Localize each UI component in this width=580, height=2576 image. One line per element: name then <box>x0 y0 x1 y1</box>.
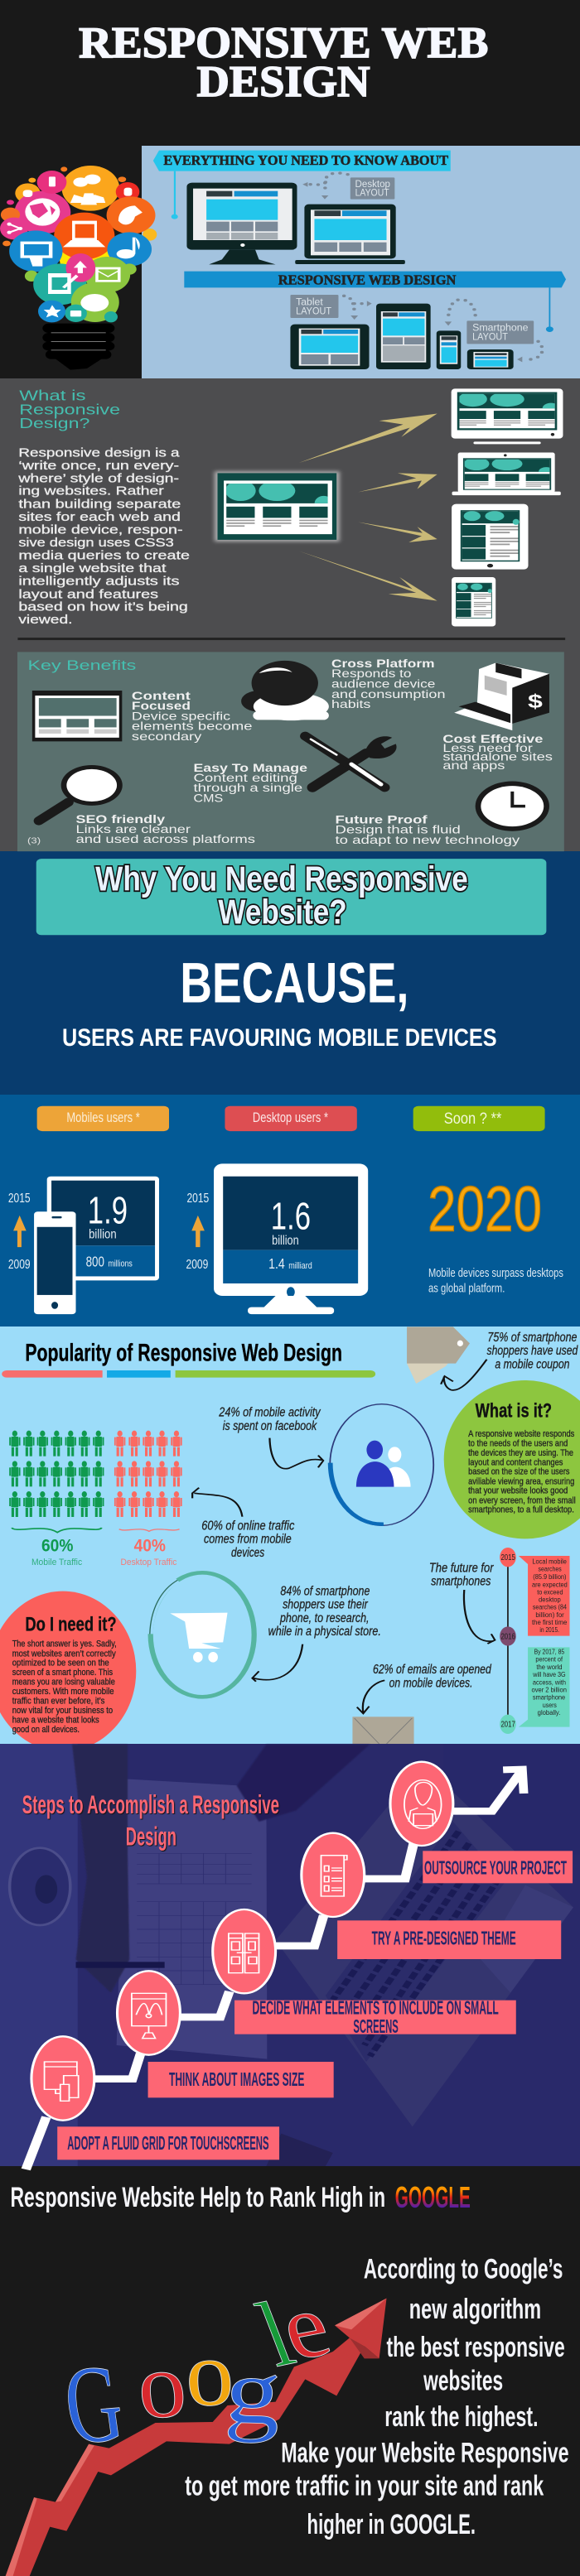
text: easy to manage: Content editing <box>193 773 297 785</box>
icon: tablet <box>452 504 529 570</box>
text: content focused: Device specific <box>132 710 231 723</box>
text block: explanation: mobile device, respon- <box>18 524 183 537</box>
icon: cash register <box>454 663 549 730</box>
page background: users panel <box>0 1095 580 1327</box>
callout: 24 percent: is spent on facebook <box>223 1418 317 1432</box>
icon: colourful light bulb <box>0 166 157 370</box>
text: easy to manage: through a single <box>193 782 302 795</box>
pictogram: mobile traffic people <box>9 1431 104 1517</box>
step 2: images size <box>118 1971 334 2097</box>
banner: responsive web design <box>184 272 566 288</box>
badge: soon <box>413 1106 545 1131</box>
callout: future for smartphones <box>429 1561 494 1588</box>
section: what is responsive design <box>17 388 565 851</box>
label: desktop layout <box>350 177 394 200</box>
text: future proof <box>335 814 520 847</box>
callout: 60 percent traffic <box>201 1519 294 1559</box>
label: tablet layout <box>290 295 338 318</box>
path: rising staircase line <box>26 1774 520 2169</box>
chart: desktop users: 2009 <box>186 1257 208 1271</box>
pictogram: desktop traffic people <box>114 1431 182 1517</box>
page background: what is panel <box>0 378 580 853</box>
text block: explanation: ing websites. Rather <box>18 485 164 498</box>
icon: landscape tablet <box>290 325 370 369</box>
step 4: pre-designed theme <box>302 1833 561 1959</box>
text block: explanation: than building separate <box>18 498 181 511</box>
note: 2017: the world <box>536 1664 563 1672</box>
section: popularity <box>0 1327 580 1758</box>
chart: mobile users: 800 <box>86 1254 104 1270</box>
callout: 84 percent <box>268 1584 381 1638</box>
heading: what is responsive design: Design? <box>19 416 89 432</box>
banner: everything you need to know <box>153 151 451 171</box>
text: future proof: Future Proof <box>335 814 428 826</box>
badge: desktop users: Desktop users * <box>253 1110 328 1125</box>
icon: cloud <box>241 661 329 720</box>
heading: what is responsive design <box>19 388 120 432</box>
note: 2015: billion) for <box>535 1611 564 1620</box>
icon: monitor <box>452 388 563 444</box>
stat: 60 percent: Mobile Traffic <box>31 1557 82 1567</box>
callout: 84 percent: while in a physical store. <box>268 1624 381 1638</box>
arrow: to facebook circle <box>269 1438 323 1469</box>
panel: do I need it: The short answer is yes. Sadly, <box>12 1639 117 1649</box>
text block: explanation: Responsive design is a <box>18 447 180 460</box>
icon: central website <box>215 471 340 542</box>
note: 2017: users <box>543 1702 557 1710</box>
text: seo friendly <box>76 814 255 846</box>
chart: mobile users: billion <box>89 1226 117 1241</box>
text: cross platform: habits <box>331 699 370 711</box>
text: future proof: Design that is fluid <box>335 825 461 836</box>
callout: future for smartphones: The future for <box>429 1561 494 1575</box>
text: source note: (3) <box>27 836 41 845</box>
icon: shopping cart circle <box>150 1572 254 1697</box>
callout: 60 percent traffic: devices <box>231 1545 264 1559</box>
photo background: desk <box>0 1744 580 2166</box>
text: easy to manage <box>193 763 307 805</box>
text: content focused <box>132 691 252 743</box>
note: 2015: desktop <box>539 1596 561 1604</box>
note: 2015 <box>519 1556 570 1636</box>
stat: 60 percent: 60% <box>41 1536 73 1555</box>
text: seo friendly: Links are cleaner <box>76 824 191 836</box>
text: easy to manage: CMS <box>193 792 223 805</box>
arrow: to envelope <box>357 1680 384 1713</box>
logo: Google letters: o <box>133 2333 191 2438</box>
panel: do I need it <box>0 1591 136 1758</box>
logo: Google letters <box>57 2274 342 2468</box>
callout: 60 percent traffic: 60% of online traffic <box>201 1519 294 1533</box>
chart: desktop users: 1.6 <box>271 1195 311 1238</box>
icon: magnifier <box>39 765 123 821</box>
text: content focused: elements become <box>132 720 252 733</box>
heading: what is responsive design: What is <box>19 388 86 404</box>
icon: landscape phone <box>467 349 514 369</box>
text: cross platform: audience device <box>331 679 435 691</box>
text: cross platform: Cross Platform <box>331 658 435 671</box>
text: seo friendly: SEO friendly <box>76 814 166 826</box>
logo: Google letters: e <box>268 2274 342 2380</box>
text: cross platform: and consumption <box>331 689 446 701</box>
badge: mobiles users <box>37 1106 169 1131</box>
badge: soon: Soon ? ** <box>444 1109 502 1128</box>
page background: hero <box>0 0 580 381</box>
callout: 62 percent: 62% of emails are opened <box>373 1662 491 1676</box>
icon: envelope <box>352 1717 414 1744</box>
chart: mobile users: 2015 <box>8 1191 31 1205</box>
arrow: dotted smartphone <box>445 300 543 362</box>
heading box: why you need <box>36 859 546 935</box>
panel: key benefits <box>17 652 564 851</box>
chart: mobile users: 1.9 <box>88 1189 128 1232</box>
arrow: to people <box>192 1488 242 1517</box>
logo: Google letters: l <box>244 2282 307 2386</box>
section: google ranking <box>6 2181 569 2576</box>
arrow: dotted tablet <box>344 296 372 320</box>
heading: steps <box>22 1789 279 1851</box>
text: cost effective: Less need for <box>442 743 533 754</box>
icon: red rising arrow <box>6 2299 387 2576</box>
label: desktop layout: Desktop <box>355 179 390 190</box>
note: 2017 <box>519 1647 570 1727</box>
text block: explanation: layout and features <box>18 588 158 601</box>
text block: explanation: viewed. <box>18 614 73 627</box>
chart: desktop users: 2015 <box>186 1191 209 1205</box>
timeline: smartphones: 2016 <box>500 1631 515 1641</box>
step 5: outsource project <box>390 1762 573 1883</box>
callout: 84 percent: phone, to research, <box>279 1611 370 1625</box>
page background: google panel <box>0 2166 580 2576</box>
panel: do I need it: means you are losing valuable <box>12 1677 115 1687</box>
callout: 62 percent: on mobile devices. <box>389 1676 473 1690</box>
logo: Google letters: o <box>183 2321 236 2426</box>
chart: desktop users <box>186 1163 368 1314</box>
headline: because: BECAUSE, <box>180 952 408 1015</box>
text: content focused: Focused <box>132 701 191 713</box>
panel: do I need it: customers. With more mobile <box>12 1686 114 1697</box>
note: 2017: percent of <box>535 1656 563 1664</box>
paper <box>117 1779 267 2059</box>
text block: explanation: where’ style of design- <box>17 472 179 485</box>
label: smartphone layout: LAYOUT <box>472 332 508 343</box>
logo: Google letters: g <box>223 2338 283 2444</box>
stat: 40 percent: Desktop Traffic <box>121 1557 177 1567</box>
text: content focused: Content <box>132 691 191 703</box>
icon: laptop <box>452 453 561 495</box>
text block: explanation: media queries to create <box>18 550 190 562</box>
note: 2017: globally. <box>538 1709 560 1717</box>
step 3: elements on small screens <box>213 1909 516 2037</box>
text block: explanation: sive design uses CSS3 <box>18 537 174 549</box>
panel: do I need it: have a website that looks <box>12 1714 99 1725</box>
callout: 84 percent: shoppers use their <box>283 1597 368 1611</box>
icon: desktop monitor <box>186 183 297 264</box>
arrow: dotted desktop <box>302 173 348 200</box>
note: 2015: searches <box>539 1566 562 1573</box>
callout: future for smartphones: smartphones <box>431 1574 491 1588</box>
heading: what is responsive design: Responsive <box>19 402 120 418</box>
section: steps: THINK ABOUT IMAGES SIZE <box>169 2069 304 2090</box>
icon: coupon tag <box>407 1327 470 1384</box>
panel: do I need it: optimized to be seen on the <box>12 1658 109 1668</box>
icon: phone <box>437 330 461 369</box>
text: cross platform: Responds to <box>331 668 411 681</box>
text block: explanation: sites for each web and <box>18 511 181 524</box>
chart: desktop users: 1.4 <box>268 1256 285 1273</box>
callout: 24 percent: 24% of mobile activity <box>219 1405 321 1419</box>
logo: Google letters: G <box>57 2342 129 2468</box>
laptop <box>276 1764 573 2126</box>
hand <box>72 1745 129 1993</box>
heading: steps: Design <box>126 1822 176 1851</box>
banner: everything you need to know: EVERYTHING YOU NEED TO KNOW ABOUT <box>163 153 448 168</box>
text: easy to manage: Easy To Manage <box>193 763 307 775</box>
brace: mobile <box>12 1528 102 1533</box>
page background: popularity panel <box>0 1327 580 1744</box>
chart: mobile users: 2009 <box>8 1257 31 1271</box>
icon: portrait tablet <box>376 304 431 369</box>
arrow: to cart <box>252 1644 302 1682</box>
tricolour underline <box>2 1370 375 1378</box>
label: desktop layout: LAYOUT <box>355 188 389 199</box>
text block: explanation: a single website that <box>18 562 167 575</box>
section: hero <box>0 18 580 378</box>
arrowhead <box>503 1769 524 1794</box>
chart: desktop users: billion <box>272 1233 299 1248</box>
brace: desktop <box>119 1529 180 1531</box>
arrow: to timeline <box>464 1590 495 1644</box>
heading: key benefits: Key Benefits <box>27 658 136 673</box>
text: cross platform <box>331 658 446 711</box>
label: smartphone layout <box>466 320 534 344</box>
panel: do I need it: screen of a smart phone. This <box>12 1667 114 1678</box>
icon: tools <box>305 736 397 787</box>
icon: clock <box>476 782 549 831</box>
badge: desktop users <box>225 1106 357 1131</box>
text block: explanation: intelligently adjusts its <box>18 575 180 588</box>
timeline: smartphones <box>500 1548 570 1734</box>
chart: mobile users: millions <box>108 1259 133 1269</box>
icon glyphs on bubbles <box>7 175 143 317</box>
label: smartphone layout: Smartphone <box>472 323 529 334</box>
panel: devices overview <box>142 146 580 378</box>
icon: content focused <box>32 691 122 741</box>
note: 2015: to exceed <box>537 1589 563 1596</box>
text: cost effective: and apps <box>442 760 505 773</box>
panel: do I need it: now vital for your business to <box>12 1705 113 1716</box>
panel: do I need it: most websites aren’t correctly <box>12 1648 116 1659</box>
panel: do I need it: good on all devices. <box>12 1724 80 1735</box>
pen <box>76 1962 165 1968</box>
banner: responsive web design: RESPONSIVE WEB DESIGN <box>278 272 456 288</box>
icon: small tablet <box>452 577 495 627</box>
text: content focused: secondary <box>132 731 202 743</box>
panel: do I need it: traffic than ever before, it’s <box>12 1696 105 1706</box>
label: tablet layout: LAYOUT <box>296 306 331 317</box>
text: cost effective: standalone sites <box>442 752 553 763</box>
heading box: why you need: Website? <box>218 893 347 932</box>
section: steps <box>0 1744 580 2169</box>
callout: 84 percent: 84% of smartphone <box>280 1584 370 1598</box>
panel: what is it <box>444 1380 580 1538</box>
timeline: smartphones: 2017 <box>500 1719 515 1729</box>
text block: explanation: ‘write once, run every- <box>18 460 179 473</box>
badge: mobiles users: Mobiles users * <box>66 1110 140 1125</box>
callout: 60 percent traffic: comes from mobile <box>204 1532 292 1546</box>
lens <box>10 1848 70 1925</box>
timeline: smartphones: 2015 <box>500 1553 515 1562</box>
icon: facebook users circle <box>330 1404 433 1525</box>
text block: according to Google <box>185 2252 569 2540</box>
icon: laptop <box>295 205 405 264</box>
step 3: elements on small screens: SCREENS <box>353 2016 399 2037</box>
text block: explanation <box>17 447 190 627</box>
stat: 60 percent <box>31 1536 82 1567</box>
arrow: to tag <box>441 1360 487 1390</box>
label: tablet layout: Tablet <box>296 296 323 308</box>
page background: why section <box>0 851 580 1095</box>
title: DESIGN <box>197 57 370 106</box>
callout: 24 percent <box>219 1405 321 1432</box>
panel: do I need it: Do I need it? <box>25 1613 117 1635</box>
text: future proof: to adapt to new technology <box>335 835 520 847</box>
icon: cash register: $ <box>528 691 543 713</box>
callout: 75 percent <box>487 1330 578 1371</box>
stat: 40 percent: 40% <box>134 1536 166 1555</box>
title <box>79 18 488 106</box>
text: mobile devices surpass <box>428 1266 563 1295</box>
chart: mobile users <box>8 1177 159 1314</box>
text: cost effective: Cost Effective <box>442 734 543 746</box>
callout: 62 percent <box>373 1662 491 1690</box>
page background: steps panel <box>0 1744 580 2166</box>
section: google ranking: GOOGLE <box>395 2181 471 2214</box>
text: seo friendly: and used across platforms <box>76 834 255 846</box>
stat: 40 percent <box>121 1536 177 1567</box>
step 1: fluid grid <box>31 2036 279 2160</box>
arrows: to devices <box>299 414 437 601</box>
text: cost effective <box>442 734 553 773</box>
chart: desktop users: milliard <box>288 1260 312 1271</box>
text block: explanation: based on how it’s being <box>18 601 188 614</box>
section: why you need responsive <box>8 859 563 1314</box>
text: mobile devices surpass: as global platform. <box>428 1282 505 1295</box>
note: 2015: in 2015. <box>539 1626 559 1635</box>
